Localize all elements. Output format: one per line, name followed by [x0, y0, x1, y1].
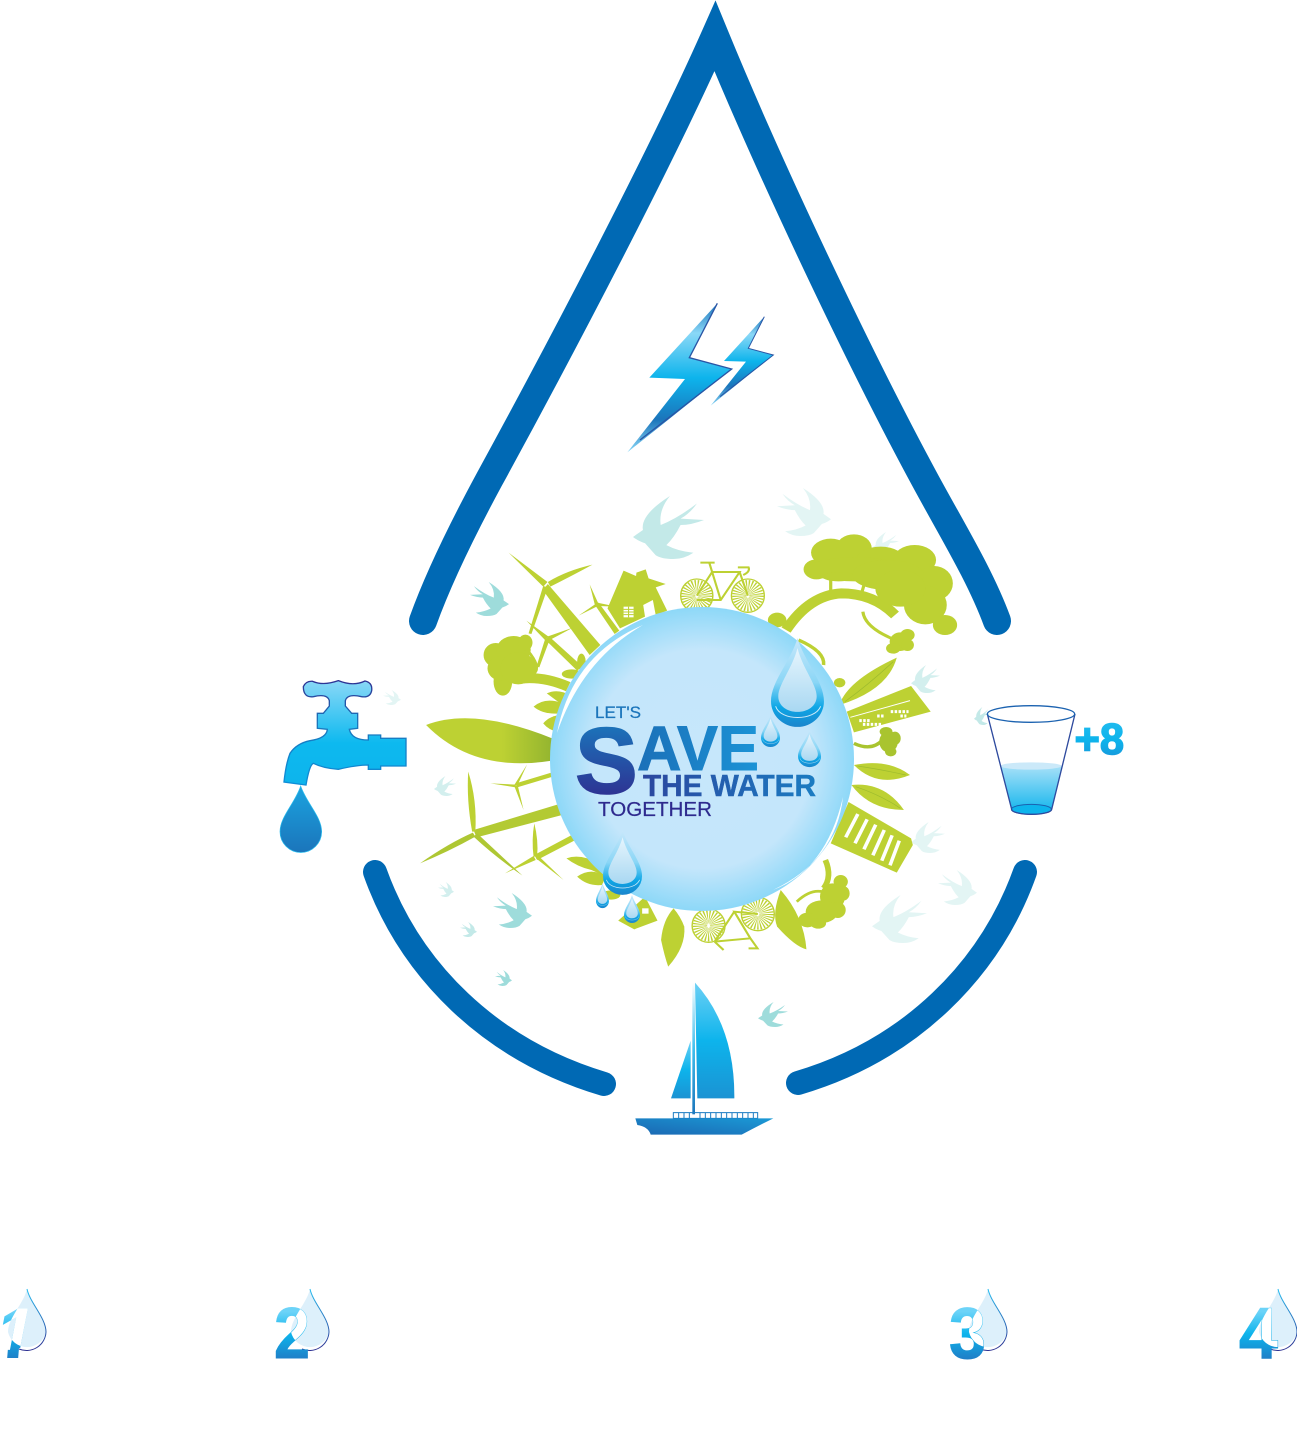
- numbered drop 1: [2, 1288, 46, 1358]
- globe highlight: bottom right: [773, 797, 843, 890]
- plants: lower left of globe: [566, 857, 620, 900]
- green eco world around the globe: [420, 534, 957, 967]
- large water drop outline: lower left arc: [375, 872, 604, 1084]
- large water drop outline: upper part: [423, 36, 997, 621]
- house: top: [607, 569, 667, 628]
- bicycle: bottom: [692, 897, 774, 950]
- numbered drop 2: 2: [274, 1294, 310, 1374]
- numbered drop 2: [276, 1288, 330, 1358]
- numbered drop 3: [950, 1288, 1008, 1360]
- water droplets on the globe: [596, 638, 824, 923]
- numbered drop 4: [1240, 1288, 1297, 1359]
- leaf: bottom right: [775, 890, 806, 949]
- globe highlight: top left: [557, 625, 643, 733]
- slogan text: [575, 703, 816, 821]
- icon: sailboat: [635, 983, 773, 1135]
- tree: left: [484, 635, 568, 696]
- numbered drop 4: 4: [1239, 1294, 1278, 1374]
- leaf: large left: [426, 718, 552, 763]
- numbered drop 2: 2: [274, 1294, 310, 1374]
- bicycle: top: [681, 563, 764, 612]
- wind turbine: top left large: [509, 553, 600, 655]
- text: +8 glasses: +8: [1074, 716, 1124, 764]
- building: lower right: [831, 802, 913, 873]
- text: LET'S: LET'S: [595, 703, 641, 722]
- wind turbine: bottom left small: [505, 823, 574, 880]
- tree: top right: [786, 534, 957, 654]
- house: bottom: [618, 897, 657, 929]
- text: THE WATER: THE WATER: [643, 768, 816, 803]
- numbered drop 3: 3: [949, 1294, 986, 1374]
- large water drop outline: lower right arc: [798, 872, 1025, 1083]
- numbered drop 3: 3: [949, 1294, 986, 1374]
- plants: left of globe: [534, 654, 586, 732]
- tree: bottom right: [797, 860, 850, 929]
- globe: water sphere: [550, 607, 854, 911]
- leaves: right: [834, 658, 910, 810]
- wind turbine: top left small: [526, 621, 582, 671]
- icon: glass of water: [987, 706, 1075, 814]
- numbered drop 4: 4: [1239, 1294, 1278, 1374]
- vine: top of globe: [768, 613, 824, 665]
- icon: lightning bolts: [627, 303, 773, 452]
- text: TOGETHER: TOGETHER: [598, 798, 712, 821]
- wind turbine: left small: [490, 764, 553, 810]
- birds flying around the globe: [383, 488, 990, 1027]
- icon: water tap with drop: [280, 681, 406, 852]
- text: AVE: AVE: [637, 714, 759, 784]
- text: large S: S: [575, 708, 638, 813]
- wind turbine: beside house: [579, 584, 619, 634]
- wind turbine: bottom left large: [420, 772, 562, 876]
- building: upper right: [847, 686, 931, 732]
- small tree: right: [854, 727, 901, 756]
- leaf: bottom: [661, 908, 684, 967]
